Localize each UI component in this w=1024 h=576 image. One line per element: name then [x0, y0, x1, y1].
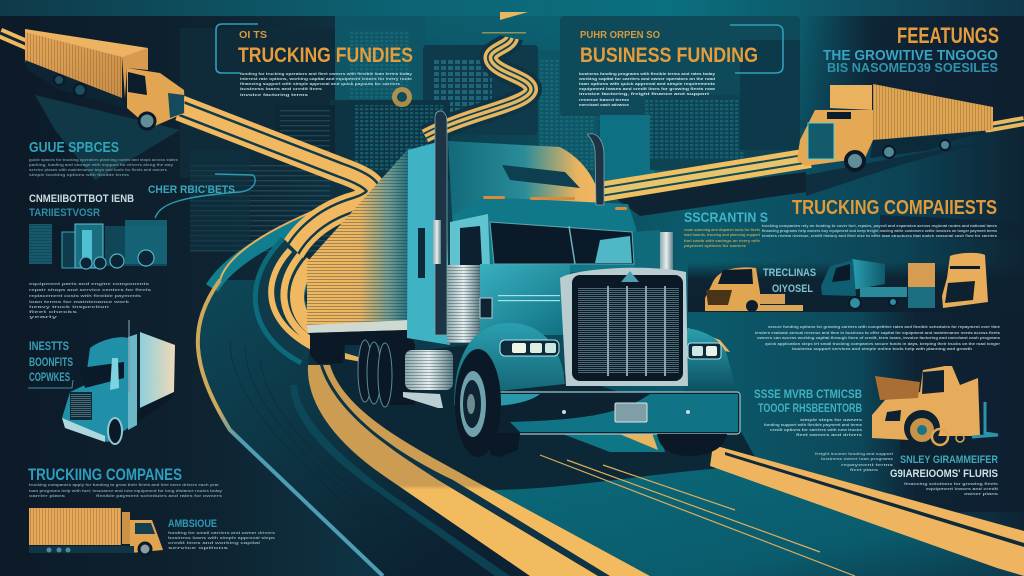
heading: left truck label: INESTTS: [29, 339, 69, 353]
exhaust stacks: [433, 111, 673, 335]
text: lower right paragraph: funding support with flexible payment and terms: [764, 422, 863, 427]
heading: lower right pair: [754, 387, 862, 415]
front left wheel: [455, 349, 520, 457]
machinery illustration: [29, 174, 255, 269]
text: scanning paragraph: route scanning and dispatch tools for fleets: [684, 227, 761, 232]
truck: lower right gold: [872, 366, 998, 470]
text: left middle paragraph: fleet checks: [29, 309, 79, 314]
heading: bottom right pair: SNLEY GIRAMMEIFER: [900, 454, 998, 466]
small truck: teal: [821, 259, 907, 309]
top band: [0, 0, 1024, 16]
lower teal ground: [473, 452, 1024, 576]
text: left middle paragraph: [29, 281, 152, 319]
text: trucking companies paragraph: [762, 223, 998, 238]
heading: machinery block: [29, 193, 134, 219]
text: ambsioue paragraph: service options: [168, 545, 230, 550]
road edge line: [198, 280, 383, 576]
text: ambsioue paragraph: business loans with simple approval steps: [168, 535, 276, 540]
main truck: [307, 111, 740, 457]
text: left middle paragraph: replacement costs with flexible payments: [29, 293, 142, 298]
small truck: crate: [908, 263, 935, 308]
small trucks backdrop: [688, 262, 1024, 312]
text: center right paragraph: lenders evaluate annual revenue and time in business to offer capital for equipment and maintenance needs across fleets: [755, 330, 1001, 335]
bumper: [490, 392, 740, 434]
text: left middle paragraph: loan terms for maintenance work: [29, 299, 130, 304]
heading: scanning: SSCRANTIN S: [684, 209, 768, 225]
truck: top right gold: [797, 84, 993, 170]
text: center right paragraph: owners can access working capital through lines of credit, term loans, invoice factoring and merchant cash programs: [757, 335, 1001, 340]
text: trucking companies paragraph: trucking companies rely on funding to cover fuel, repairs, payroll and expansion across regional routes and national lanes: [762, 223, 998, 228]
heading: lower right pair: TOOOF RHSBEENTORB: [758, 401, 862, 415]
heading: trucking funding left: TRUCKING FUNDIES: [238, 44, 413, 67]
text: bottom right paragraphs: [815, 451, 999, 496]
front fender right: [684, 328, 737, 392]
text: trucking companies left paragraph: carrier plans: [29, 493, 66, 498]
text: bottom right paragraphs: business owner loan programs: [821, 456, 894, 461]
flag marker: [500, 12, 528, 20]
heading: business funding: [580, 25, 783, 73]
text: trucking companies left paragraph: loan programs help with fuel, insurance and new equipment for long distance routes today: [29, 488, 223, 493]
road patch below bumper: [560, 433, 665, 452]
text: bottom right paragraphs: repayment terms: [841, 462, 894, 467]
text: lower right paragraph: credit options for carriers with new trucks: [770, 427, 863, 432]
text: lower right paragraph: [764, 417, 863, 437]
grille: [560, 268, 688, 386]
text: trucking funding paragraph: business loans and credit lines: [240, 86, 323, 91]
heading: machinery block: CNMEIIBOTTBOT IENB: [29, 193, 134, 205]
text: bottom right paragraphs: financing solutions for growing fleets: [904, 481, 999, 486]
text: center right paragraph: quick application steps let small trucking companies secure funds in days, keeping their trucks on the road longer: [765, 341, 1000, 346]
heading: trucking companies left: TRUCKIING COMPANES: [28, 465, 182, 484]
heading: business funding: BUSINESS FUNDING: [580, 44, 758, 67]
text: left middle paragraph: equipment parts and engine components: [29, 281, 150, 286]
text: guide paragraph: parking, loading and storage with support for drivers along the way: [29, 162, 174, 167]
heading: trucking funding left: [216, 24, 413, 73]
text: scanning paragraph: load boards, tracking and planning support: [684, 232, 761, 237]
city skyline: [180, 16, 800, 255]
text: ambsioue paragraph: [168, 530, 276, 550]
text: ambsioue paragraph: funding for small carriers and owner drivers: [168, 530, 276, 535]
rear wheels: [358, 340, 392, 407]
swoosh: shadow under top left truck: [35, 95, 180, 180]
fuel tank and step: [403, 350, 453, 408]
license plate: [615, 403, 647, 422]
horizon line: [482, 32, 526, 34]
roof fairing: [448, 141, 600, 216]
text: bottom right paragraphs: fleet plans: [850, 467, 879, 472]
label: small truck caption: [763, 267, 816, 295]
text: trucking funding paragraph: financing support with simple approval and quick payouts for carriers: [240, 81, 401, 86]
text: scanning paragraph: [684, 227, 761, 248]
trailer: [307, 147, 415, 405]
text: bottom right paragraphs: equipment leases and credit: [926, 486, 999, 491]
text: guide paragraph: service plazas with maintenance bays and tools for fleets and owners: [29, 167, 168, 172]
text: center right paragraph: [755, 324, 1001, 351]
text: trucking companies left paragraph: flexible payment schedules and rates for owners: [96, 493, 223, 498]
heading: left truck label: COPWKES: [29, 370, 70, 384]
small truck: gold: [705, 267, 803, 312]
heading: lower right pair: SSSE MVRB CTMICSB: [754, 387, 862, 401]
label: small truck caption: OIYOSEL: [772, 283, 813, 295]
road: lower left curves: [271, 250, 312, 347]
text: center right paragraph: secure funding options for growing carriers with competitive rates and flexible schedules for repayment over time: [768, 324, 1001, 329]
heading: features: BIS NASOMED39 SOESILES: [827, 60, 998, 75]
road: far winding highway: [425, 38, 531, 136]
text: scanning paragraph: fuel cards with savings on every mile: [684, 238, 761, 243]
text: center right paragraph: business support services and simple online tools help with planning and growth: [792, 346, 973, 351]
heading: ambsioue: AMBSIOUE: [168, 518, 217, 530]
heading: guide spaces: GUUE SPBCES: [29, 139, 119, 156]
text: business funding paragraph: working capital for carriers and owner operators on the road: [578, 76, 716, 81]
cab body: [470, 264, 570, 335]
text: trucking companies left paragraph: [29, 482, 223, 498]
text: left middle paragraph: yearly: [29, 314, 59, 319]
text: ambsioue paragraph: credit lines and working capital: [168, 540, 260, 545]
heading: left truck label: [28, 339, 73, 388]
heading: trucking funding left: OI TS: [239, 30, 267, 41]
windshield: [490, 222, 634, 264]
text: business funding paragraph: business funding programs with flexible terms and rates today: [579, 71, 716, 76]
text: scanning paragraph: payment options for owners: [684, 243, 747, 248]
truck: top left gold: [25, 29, 185, 129]
central road surface: [330, 345, 760, 490]
body pinstripes: [498, 295, 560, 301]
road gold band right: [688, 328, 1024, 576]
text: business funding paragraph: equipment leases and credit lines for growing fleets now: [579, 86, 716, 91]
truck: left teal illustration: [62, 320, 175, 444]
text: guide paragraph: simple booking options with flexible terms: [29, 172, 130, 177]
right dark panel: [860, 312, 1024, 512]
small truck: gold cab: [942, 253, 988, 308]
heading: business funding: PUHR ORPEN SO: [580, 30, 660, 41]
heading: machinery block: TARIIESTVOSR: [29, 207, 100, 219]
heading: features: [823, 23, 999, 75]
right headlight: [688, 343, 721, 359]
truck: bottom left gold: [29, 508, 163, 555]
text: bottom right paragraphs: owner plans: [964, 491, 999, 496]
text: trucking funding paragraph: interest rate options, working capital and equipment leases for every route: [240, 76, 413, 81]
text: bottom right paragraphs: freight income funding and support: [815, 451, 894, 456]
text: guide paragraph: [29, 157, 179, 177]
text: left middle paragraph: heavy truck inspection: [29, 304, 110, 309]
chrome tank: [447, 265, 492, 343]
text: trucking funding paragraph: invoice factoring terms: [240, 92, 309, 97]
road thin gold lines: [540, 455, 855, 576]
text: business funding paragraph: [578, 71, 716, 107]
heading: bottom right pair: G9IAREIOOMS' FLURIS: [890, 468, 998, 480]
heading: machinery callout: CHER RBIC'BETS: [148, 184, 235, 196]
heading: features: THE GROWITIVE TNGOGO: [823, 47, 998, 64]
text: business funding paragraph: loan options with quick approval and simple requirements: [579, 81, 716, 86]
label: small truck caption: TRECLINAS: [763, 267, 816, 279]
text: trucking companies paragraph: financing programs help owners buy equipment and keep freight moving while customers settle invoices on longer payment terms: [762, 228, 998, 233]
cab roof: [452, 197, 640, 280]
road gold band: [308, 365, 650, 576]
road: winding left highway: [0, 33, 373, 288]
text: trucking companies left paragraph: trucking companies apply for funding to grow their fleets and hire more drivers each year: [29, 482, 219, 487]
heading: bottom right pair: [890, 454, 998, 480]
heading: left truck label: BOONFITS: [29, 355, 73, 369]
text: business funding paragraph: invoice factoring, freight finance and support: [579, 91, 710, 96]
sleeper: [407, 140, 450, 345]
text: lower right paragraph: simple steps for owners: [800, 417, 863, 422]
swoosh: lower left road verge: [198, 280, 530, 576]
left headlight: [500, 340, 559, 356]
text: trucking funding paragraph: [240, 71, 413, 97]
text: trucking companies paragraph: lenders review revenue, credit history and fleet size to offer loan structures that match seasonal cash flow for carriers: [762, 233, 998, 238]
text: business funding paragraph: revenue based terms: [579, 97, 630, 102]
text: business funding paragraph: merchant cash advance: [579, 102, 630, 107]
text: lower right paragraph: fleet owners and drivers: [796, 432, 863, 437]
road: right highway: [600, 121, 1024, 216]
marker lights: [483, 196, 627, 210]
front right wheel: [657, 434, 727, 456]
text: guide paragraph: guide spaces for trucking operators planning routes and stops across states: [29, 157, 179, 162]
text: trucking funding paragraph: funding for trucking operators and fleet owners with flexible loan terms today: [240, 71, 413, 76]
side windows: [418, 214, 490, 278]
text: left middle paragraph: repair shops and service centers for fleets: [29, 287, 152, 292]
front fender left: [454, 323, 565, 420]
